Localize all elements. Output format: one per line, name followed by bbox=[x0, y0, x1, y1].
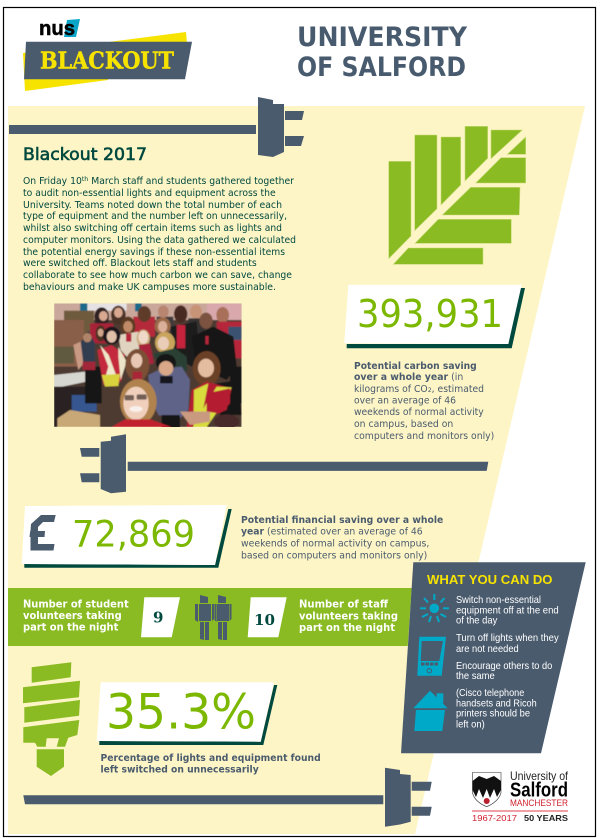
staff volunteers label: volunteers taking bbox=[299, 610, 398, 622]
top plug bbox=[9, 97, 304, 157]
panel advice text: printers should be bbox=[456, 708, 530, 720]
logo shield bbox=[472, 772, 501, 807]
panel advice text: left on) bbox=[456, 719, 485, 731]
financial saving description: year (estimated over an average of 46 bbox=[241, 526, 423, 537]
icon: light bulb bbox=[23, 662, 80, 776]
stat card: lights left on: 35.3% bbox=[106, 684, 256, 740]
intro text block: University. Teams noted down the total number of each bbox=[23, 200, 282, 211]
panel: what you can do bbox=[401, 562, 586, 753]
intro text block: collaborate to see how much carbon we can save, change bbox=[23, 270, 292, 281]
lights description: left switched on unnecessarily bbox=[100, 765, 259, 776]
icon: phone bbox=[417, 637, 446, 676]
student count bbox=[141, 597, 180, 637]
financial saving description: Potential financial saving over a whole bbox=[241, 515, 444, 526]
University of Salford logo: 50 YEARS bbox=[524, 813, 568, 823]
panel advice text: equipment off at the end bbox=[456, 604, 559, 616]
student count: 9 bbox=[153, 609, 163, 627]
panel advice text: handsets and Ricoh bbox=[456, 697, 537, 709]
NUS Blackout logo: BLACKOUT bbox=[40, 48, 174, 75]
intro text block: March staff and students gathered together bbox=[88, 176, 294, 187]
University of Salford logo: Salford bbox=[510, 780, 568, 802]
carbon saving description: on campus, based on bbox=[354, 419, 453, 430]
student volunteers label: part on the night bbox=[23, 622, 118, 634]
intro text block bbox=[23, 175, 296, 293]
panel advice text bbox=[456, 594, 559, 731]
middle plug bbox=[80, 434, 488, 493]
staff count bbox=[248, 597, 287, 637]
NUS Blackout logo bbox=[23, 18, 192, 91]
panel advice text: Turn off lights when they bbox=[456, 632, 559, 644]
intro text block: On Friday 10 bbox=[23, 176, 84, 187]
icon: house bbox=[413, 691, 448, 731]
photo: group of volunteers bbox=[54, 303, 242, 427]
student volunteers label: volunteers taking bbox=[23, 610, 122, 622]
panel advice text: the same bbox=[456, 670, 495, 682]
carbon saving description: Potential carbon saving bbox=[354, 361, 477, 372]
intro text block: computer monitors. Using the data gathered we calculated bbox=[23, 235, 296, 246]
carbon saving description: kilograms of CO2, estimated bbox=[354, 384, 484, 395]
panel advice text: are not needed bbox=[456, 643, 519, 655]
financial saving description: weekends of normal activity on campus, bbox=[241, 539, 429, 550]
icon: pound sign bbox=[30, 515, 56, 550]
University of Salford logo: University of bbox=[510, 769, 569, 783]
panel advice text: Switch non-essential bbox=[456, 594, 541, 606]
carbon saving description: over an average of 46 bbox=[354, 396, 456, 407]
icon: sun bbox=[420, 594, 449, 622]
financial saving description bbox=[241, 515, 444, 561]
intro text block: the potential energy savings if these non-essential items bbox=[23, 247, 285, 258]
intro text block: were switched off. Blackout lets staff and students bbox=[23, 258, 257, 269]
panel advice text: Encourage others to do bbox=[456, 660, 552, 672]
staff volunteers label bbox=[299, 599, 398, 634]
carbon saving description: computers and monitors only) bbox=[354, 431, 494, 442]
intro text block: to audit non-essential lights and equipment across the bbox=[23, 188, 276, 199]
University of Salford logo bbox=[472, 769, 569, 823]
title: UNIVERSITY bbox=[297, 22, 468, 53]
University of Salford logo: 1967-2017 bbox=[472, 813, 517, 823]
stat card: carbon saving: 393,931 bbox=[357, 292, 503, 337]
lights description: Percentage of lights and equipment found bbox=[100, 753, 321, 764]
carbon saving description: weekends of normal activity bbox=[354, 407, 484, 418]
panel advice text: of the day bbox=[456, 615, 498, 627]
carbon saving description bbox=[354, 361, 494, 442]
panel heading: WHAT YOU CAN DO bbox=[427, 572, 552, 587]
intro text block: whilst also switching off certain items such as lights and bbox=[23, 223, 282, 234]
student volunteers label: Number of student bbox=[23, 598, 129, 610]
staff volunteers label: Number of staff bbox=[299, 599, 389, 611]
financial saving description: based on computers and monitors only) bbox=[241, 550, 427, 561]
carbon saving description: over a whole year (in bbox=[354, 372, 463, 383]
bottom plug bbox=[23, 768, 432, 827]
stat card: financial saving bbox=[22, 505, 232, 568]
heading: Blackout 2017: Blackout 2017 bbox=[23, 145, 147, 165]
intro text block: type of equipment and the number left on unnecessarily, bbox=[23, 211, 287, 222]
icon: two people bbox=[195, 595, 232, 640]
title: OF SALFORD bbox=[297, 52, 466, 83]
student volunteers label bbox=[23, 598, 129, 634]
intro text block: behaviours and make UK campuses more sustainable. bbox=[23, 282, 276, 293]
intro text block: th bbox=[82, 175, 88, 183]
icon: leaf bbox=[389, 126, 526, 264]
NUS Blackout logo: nus bbox=[39, 18, 75, 40]
title bbox=[297, 22, 468, 83]
stat card: financial saving: 72,869 bbox=[72, 513, 195, 556]
staff volunteers label: part on the night bbox=[299, 622, 395, 634]
lights description bbox=[100, 753, 321, 776]
University of Salford logo: MANCHESTER bbox=[510, 798, 568, 808]
panel advice text: (Cisco telephone bbox=[456, 687, 524, 699]
staff count: 10 bbox=[254, 611, 275, 629]
stat card: carbon saving bbox=[344, 285, 525, 348]
volunteers band bbox=[8, 588, 412, 646]
